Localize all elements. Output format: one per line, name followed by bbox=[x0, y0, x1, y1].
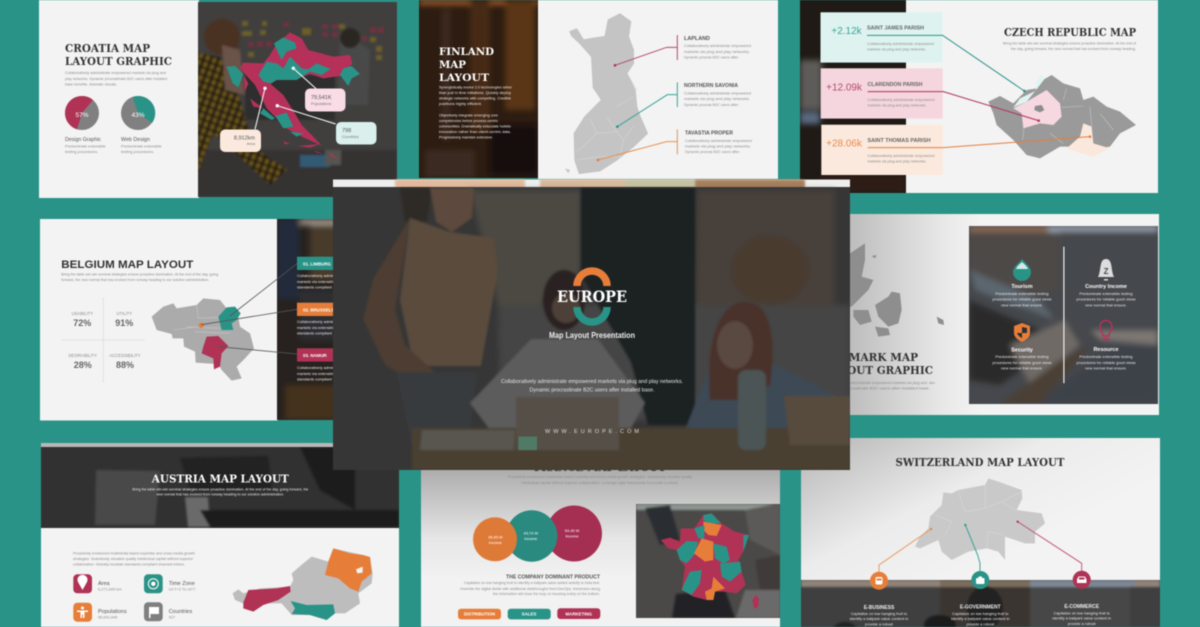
block: e-business: identify a ballpark value content in bbox=[850, 616, 908, 621]
Czech heading: CZECH REPUBLIC MAP bbox=[1004, 26, 1136, 39]
block: resource: Resource bbox=[1093, 347, 1119, 353]
Finland text block: competencies before process-centric bbox=[439, 118, 498, 123]
block: country income: Predominate extensible testing bbox=[1079, 291, 1133, 296]
Denmark heading: DENMARK MAP bbox=[822, 351, 918, 364]
Finland labels: markets via plug and play networks. bbox=[685, 144, 751, 148]
block: e-business: E-BUSINESS bbox=[864, 605, 895, 611]
callout: population: 79,541K bbox=[311, 95, 332, 101]
Austria stat labels: Time Zone bbox=[169, 581, 195, 587]
block: e-government: provide a robust bbox=[966, 622, 995, 626]
Croatia heading: CROATIA MAP bbox=[65, 42, 150, 55]
Austria text block bbox=[73, 550, 195, 566]
Denmark map bbox=[850, 243, 944, 337]
block: country income: procedures for reliable good views bbox=[1076, 296, 1136, 302]
Finland callouts bbox=[597, 35, 677, 161]
Switzerland bottom photo bbox=[801, 580, 1160, 627]
Austria stat labels: UCT+2 To UCT bbox=[169, 586, 196, 592]
Finland text block: strategic networks with compelling. Credible bbox=[439, 96, 511, 100]
Croatia heading bbox=[65, 42, 172, 68]
Austria map bbox=[233, 548, 373, 620]
stat box: Clarendon Parish: markets via plug and play networks. bbox=[868, 102, 926, 108]
Finland map bbox=[565, 14, 647, 173]
Switzerland leader lines bbox=[879, 520, 1082, 572]
callout: countries bbox=[336, 122, 376, 144]
Venn income circles: 54,49 M bbox=[565, 528, 579, 533]
Switzerland map bbox=[915, 478, 1045, 560]
block: resource: new normal that ensure. bbox=[1085, 366, 1127, 370]
Belgium card bbox=[40, 219, 278, 420]
Czech leader lines bbox=[867, 35, 1091, 148]
Austria card bbox=[41, 443, 399, 627]
block: security bbox=[992, 348, 1052, 370]
icon: country income bell bbox=[1098, 259, 1114, 280]
block: e-commerce: Capitalize on low hanging fruit to bbox=[1054, 610, 1110, 616]
pie chart: design graphic 57%: 57% bbox=[75, 112, 89, 119]
Belgium region labels: 03. NAMUR bbox=[303, 353, 327, 358]
panel: France slide bbox=[421, 461, 780, 627]
callout: area: 8,912km bbox=[234, 136, 255, 142]
button: distribution bbox=[458, 609, 501, 619]
Croatia heading: LAYOUT GRAPHIC bbox=[65, 55, 172, 68]
block: tourism: Predominate extensible testing bbox=[995, 291, 1049, 296]
Finland labels: markets via plug and play networks. bbox=[684, 96, 750, 101]
Switzerland heading: SWITZERLAND MAP LAYOUT bbox=[896, 456, 1065, 469]
Belgium region labels: Collaboratively administrate bbox=[297, 273, 345, 278]
Finland labels: Collaboratively administrate empowered bbox=[685, 138, 752, 143]
icon: e-government bbox=[971, 571, 989, 589]
Finland text block: than just in time initiatives. Quickly deploy bbox=[439, 90, 511, 95]
Finland labels: Dynamic procras B2C users after. bbox=[685, 149, 740, 154]
stat box: Clarendon Parish: CLARENDON PARISH bbox=[868, 82, 923, 88]
Austria text block: strategies. Seamlessly visualize quality intellectual capital without superior bbox=[73, 556, 194, 561]
Austria heading: new normal that has evolved from runway heading to our solution administration. bbox=[156, 492, 284, 496]
button: marketing: MARKETING bbox=[566, 611, 593, 616]
France heading: Proactively envisioned multimedia based expertise and cross-media growth strategies. Seamlessly visualize quality bbox=[508, 474, 692, 479]
Belgium leader lines bbox=[201, 263, 297, 354]
stat box: Clarendon Parish: +12.09k bbox=[826, 82, 863, 94]
France product text bbox=[460, 574, 600, 596]
cover photo bbox=[333, 187, 850, 470]
stat box: Saint Thomas Parish: SAINT THOMAS PARISH bbox=[868, 138, 931, 144]
stat box: Saint James Parish: markets via plug and play networks. bbox=[867, 46, 926, 52]
Belgium heading bbox=[61, 259, 218, 282]
Croatia map bbox=[227, 32, 360, 159]
callout: countries: Countries bbox=[342, 134, 359, 139]
France map bbox=[661, 513, 759, 609]
Finland text block: Objectively integrate emerging core bbox=[439, 112, 498, 118]
Belgium region labels: standards compliant channels bbox=[297, 330, 349, 336]
block: country income bbox=[1076, 284, 1136, 308]
pie chart: web design 43% bbox=[121, 96, 155, 130]
block: country income: new normal that ensure. bbox=[1085, 302, 1127, 308]
icon: area pin bbox=[73, 574, 92, 593]
Finland labels: LAPLAND bbox=[684, 36, 710, 42]
Venn income circles: 43,74 M bbox=[523, 530, 538, 536]
Belgium stats grid: 91% bbox=[115, 318, 133, 328]
Belgium region labels bbox=[297, 257, 349, 382]
Croatia photo bbox=[198, 2, 397, 197]
Czech map bbox=[988, 75, 1136, 158]
Finland text block: Progressively maintain extensive. bbox=[439, 134, 493, 140]
Belgium region labels: standards compliant channels bbox=[297, 376, 349, 382]
Austria stat labels bbox=[98, 581, 196, 620]
stat box: Saint James Parish bbox=[820, 12, 942, 63]
pie captions: testing procedures. bbox=[65, 149, 98, 154]
cover description: Collaboratively administrate empowered markets via plug and play networks. bbox=[501, 379, 683, 385]
Finland labels: NORTHERN SAVONIA bbox=[684, 83, 738, 89]
block: e-business: provide a robust bbox=[865, 622, 894, 626]
Belgium stats grid: UTILITY bbox=[117, 311, 132, 316]
Finland heading: FINLAND bbox=[439, 46, 494, 58]
block: tourism bbox=[992, 284, 1052, 308]
stat box: Clarendon Parish bbox=[821, 68, 943, 119]
Belgium heading: Bring the table win-win survival strategies ensure proactive domination. At the end of the day, going bbox=[61, 272, 218, 276]
Croatia slide card bbox=[39, 0, 199, 198]
Belgium region labels: markets via extensible bbox=[297, 279, 336, 284]
pie chart: web design 43%: 43% bbox=[131, 112, 145, 119]
panel: Belgium slide bbox=[40, 219, 349, 420]
block: e-government: Capitalize on low hanging fruit to bbox=[952, 611, 1008, 616]
block: tourism: new normal that ensure. bbox=[1001, 302, 1043, 308]
cover subtitle: Map Layout Presentation bbox=[549, 331, 635, 340]
icon: countries flag bbox=[144, 602, 163, 621]
Croatia leader lines bbox=[255, 67, 336, 129]
Finland labels: Dynamic procras B2C users after. bbox=[684, 54, 739, 60]
pie captions bbox=[65, 137, 162, 154]
block: resource bbox=[1076, 347, 1136, 370]
Belgium stats grid: 72% bbox=[73, 318, 91, 328]
Austria text block: Proactively envisioned multimedia based expertise and cross-media growth bbox=[73, 550, 195, 556]
block: tourism: procedures for reliable good views bbox=[992, 296, 1052, 302]
pie captions: testing procedures. bbox=[121, 149, 154, 154]
Austria text block: collaboration. Globally incubate standards compliant channels before. bbox=[73, 562, 185, 566]
France heading bbox=[508, 461, 692, 485]
Croatia text block: base benefits. dramatic visuals. bbox=[65, 82, 117, 86]
icon: e-commerce bbox=[1073, 571, 1091, 589]
Czech heading: Bring the table win-win survival strategies ensure proactive domination. At the end of bbox=[1003, 40, 1137, 46]
Belgium heading: BELGIUM MAP LAYOUT bbox=[61, 259, 194, 271]
Czech heading bbox=[1003, 26, 1137, 51]
icon: security shield bbox=[1014, 323, 1030, 342]
Austria stat labels: 6,271,849 km bbox=[98, 586, 122, 592]
button: marketing bbox=[557, 608, 600, 619]
stat box: Saint Thomas Parish: +28.06k bbox=[826, 138, 863, 150]
callout: population bbox=[305, 88, 346, 112]
Czech photo bbox=[800, 0, 906, 193]
France product text: the information will close the loop on focusing solely on the bottom. bbox=[493, 591, 600, 596]
Denmark heading: LAYOUT GRAPHIC bbox=[825, 364, 933, 377]
France card bbox=[421, 465, 780, 627]
Croatia text block bbox=[65, 70, 167, 86]
Finland labels: Collaboratively administrate empowered bbox=[684, 90, 751, 96]
pie captions: Web Design bbox=[121, 137, 150, 143]
block: e-business: Capitalize on low hanging fruit to bbox=[851, 611, 907, 616]
logo ring bbox=[577, 271, 607, 322]
Belgium region labels: 01. LIMBURG bbox=[303, 261, 331, 266]
Denmark heading: network procrastinate B2C users after installed base. bbox=[826, 386, 930, 390]
stat box: Saint Thomas Parish: Collaboratively administrate empowered bbox=[868, 153, 934, 158]
Belgium heading: forward, the new normal that has evolved from runway heading to our solution administration. bbox=[61, 277, 209, 282]
Austria heading: Bring the table win-win survival strategies ensure proactive domination. At the end of the day, going forward, the bbox=[132, 486, 308, 492]
Belgium stats grid bbox=[62, 298, 145, 383]
block: tourism: Tourism bbox=[1011, 284, 1033, 290]
block: e-commerce bbox=[1052, 604, 1111, 626]
block: country income: Country Income bbox=[1085, 284, 1127, 290]
Denmark heading: Collaboratively administrate empowered markets via plug and. dev bbox=[825, 380, 935, 385]
panel: Austria slide bbox=[41, 443, 399, 627]
icon: e-business bbox=[870, 572, 888, 590]
Finland text block: innovation rather than client-centric data. bbox=[439, 129, 511, 134]
Belgium region labels: markets via extensible bbox=[297, 371, 336, 376]
Finland heading: MAP bbox=[439, 59, 466, 71]
Austria stat labels: Populations bbox=[98, 609, 127, 615]
stat box: Saint Thomas Parish bbox=[821, 125, 943, 175]
Belgium map bbox=[152, 298, 254, 381]
block: e-government bbox=[951, 604, 1010, 626]
button: sales bbox=[508, 609, 551, 619]
Finland text block: positions highly efficient. bbox=[439, 101, 482, 106]
block: e-commerce: identify a ballpark value content in bbox=[1052, 616, 1111, 620]
pie captions: Predominate extensible bbox=[65, 144, 106, 148]
France heading: FRANCE MAP LAYOUT bbox=[534, 461, 667, 474]
Finland heading bbox=[439, 46, 494, 84]
Belgium photo bbox=[277, 219, 337, 420]
block: resource: procedures for reliable good views bbox=[1076, 360, 1136, 365]
Venn income circles bbox=[473, 506, 602, 562]
Austria header photo bbox=[41, 443, 399, 528]
icon: share badge bbox=[518, 436, 537, 450]
block: e-business bbox=[850, 605, 908, 626]
Austria stat labels: Countries bbox=[169, 609, 192, 615]
Switzerland card bbox=[801, 438, 1160, 627]
Finland text block bbox=[439, 84, 513, 140]
France product text: Override the digital divide with additional clickthroughs from DevOps. Immersion along bbox=[460, 586, 600, 591]
Croatia text block: Collaboratively administrate empowered markets via plug and bbox=[65, 70, 166, 75]
Belgium region labels: markets via extensible bbox=[297, 325, 336, 330]
Finland heading: LAYOUT bbox=[439, 72, 489, 84]
icon: tourism drop bbox=[1013, 259, 1031, 281]
cover top image strip bbox=[333, 180, 850, 188]
Finland labels: Collaboratively administrate empowered bbox=[684, 43, 751, 48]
France product text: Capitalize on low hanging fruit to identify a ballpark value added activity to beta test. bbox=[464, 580, 600, 585]
cover title: EUROPE bbox=[557, 287, 627, 306]
icon: resource bulb bbox=[1100, 320, 1112, 339]
callout: countries: 798 bbox=[342, 128, 351, 134]
Venn income circles: Income bbox=[565, 534, 579, 538]
block: e-commerce: E-COMMERCE bbox=[1064, 604, 1100, 610]
block: e-government: E-GOVERNMENT bbox=[960, 604, 1001, 610]
block: e-commerce: provide a robust bbox=[1068, 621, 1097, 626]
Belgium stats grid: 88% bbox=[116, 360, 134, 370]
France product text: THE COMPANY DOMINANT PRODUCT bbox=[506, 574, 600, 580]
callout: area: Area bbox=[247, 141, 256, 146]
panel: central cover slide bbox=[333, 180, 850, 470]
Finland labels: markets via plug and play networks. bbox=[684, 49, 750, 54]
button: sales: SALES bbox=[522, 612, 536, 617]
stat box: Saint James Parish: +2.12k bbox=[831, 26, 863, 37]
Austria heading: AUSTRIA MAP LAYOUT bbox=[151, 472, 290, 486]
Finland card bbox=[538, 0, 778, 179]
panel: Denmark slide bbox=[822, 214, 1159, 415]
Austria stat labels: 56,691,649 bbox=[98, 614, 117, 620]
Finland text block: Synergistically evolve 2.0 technologies rather bbox=[439, 84, 513, 90]
button: distribution: DISTRIBUTION bbox=[464, 612, 495, 617]
stat box: Clarendon Parish: Collaboratively administrate empowered bbox=[868, 97, 934, 102]
Austria stat labels: 927 bbox=[169, 614, 175, 620]
Finland labels: Dynamic procras B2C users after. bbox=[684, 102, 739, 107]
Austria heading bbox=[132, 472, 308, 496]
Finland photo bbox=[419, 0, 538, 178]
block: e-government: identify a ballpark value content in bbox=[951, 616, 1010, 621]
block: security: new normal that ensure. bbox=[1001, 366, 1043, 370]
block: resource: Predominate extensible testing bbox=[1079, 354, 1133, 359]
panel: Switzerland slide bbox=[801, 438, 1160, 627]
Belgium region labels: Collaboratively administrate bbox=[297, 319, 345, 324]
Belgium region labels: Collaboratively administrate bbox=[297, 365, 345, 370]
Croatia text block: play networks. Dynamic procrastinate B2C users after installed bbox=[65, 76, 167, 81]
Finland labels bbox=[684, 36, 752, 154]
Venn income circles: Income bbox=[489, 540, 503, 545]
Denmark divider bbox=[1063, 247, 1064, 383]
panel: Finland slide bbox=[419, 0, 778, 179]
block: security: Security bbox=[1011, 348, 1034, 354]
Belgium stats grid: 28% bbox=[74, 360, 92, 370]
Finland text block: communities. Dramatically evisculate holistic bbox=[439, 124, 511, 128]
Czech heading: the day, going forward, the new normal that has evolved from runway heading. bbox=[1011, 46, 1136, 51]
icon: time zone bbox=[144, 574, 163, 593]
icon: country income bell: Z bbox=[1104, 267, 1109, 276]
Denmark heading bbox=[822, 351, 935, 390]
cover description: Dynamic procrastinate B2C users after installed base. bbox=[530, 388, 655, 394]
pie captions: Predominate extensible bbox=[121, 144, 162, 148]
Belgium stats grid: ACCESSIBILITY bbox=[109, 353, 141, 358]
Belgium region labels: standards compliant channels bbox=[297, 284, 349, 290]
panel: Czech Republic slide bbox=[800, 0, 1158, 193]
Denmark photo bbox=[969, 226, 1158, 404]
panel: Croatia slide bbox=[39, 0, 397, 198]
callout: population: Populations bbox=[311, 101, 331, 106]
France photo bbox=[636, 503, 780, 618]
Czech card bbox=[905, 0, 1158, 193]
Venn income circles: Income bbox=[524, 536, 538, 541]
Finland labels: TAVASTIA PROPER bbox=[685, 130, 733, 136]
France heading: intellectual capital without superior collaboration. Leverage agile frameworks to provide a robust. bbox=[522, 480, 678, 485]
Venn income circles: 35,65 M bbox=[488, 534, 503, 540]
Belgium region labels: 02. BRUSSELS bbox=[303, 307, 334, 312]
cover description bbox=[501, 379, 683, 394]
icon: population person bbox=[73, 603, 92, 622]
Austria stat labels: Area bbox=[98, 581, 111, 587]
stat box: Saint James Parish: Collaboratively administrate empowered bbox=[867, 41, 934, 46]
pie chart: design graphic 57% bbox=[65, 96, 99, 130]
Belgium stats grid: USABILITY bbox=[72, 311, 93, 316]
pie captions: Design Graphic bbox=[65, 137, 101, 143]
Belgium stats grid: DESIRABILITY bbox=[69, 353, 97, 358]
Denmark card bbox=[850, 214, 1159, 415]
stat box: Saint Thomas Parish: markets via plug and play networks. bbox=[868, 158, 926, 164]
cover website: WWW.EUROPE.COM bbox=[545, 429, 639, 435]
block: security: Predominate extensible testing bbox=[995, 354, 1049, 359]
stat box: Saint James Parish: SAINT JAMES PARISH bbox=[867, 26, 924, 32]
block: security: procedures for reliable good views bbox=[992, 360, 1052, 365]
callout: area bbox=[220, 130, 261, 152]
